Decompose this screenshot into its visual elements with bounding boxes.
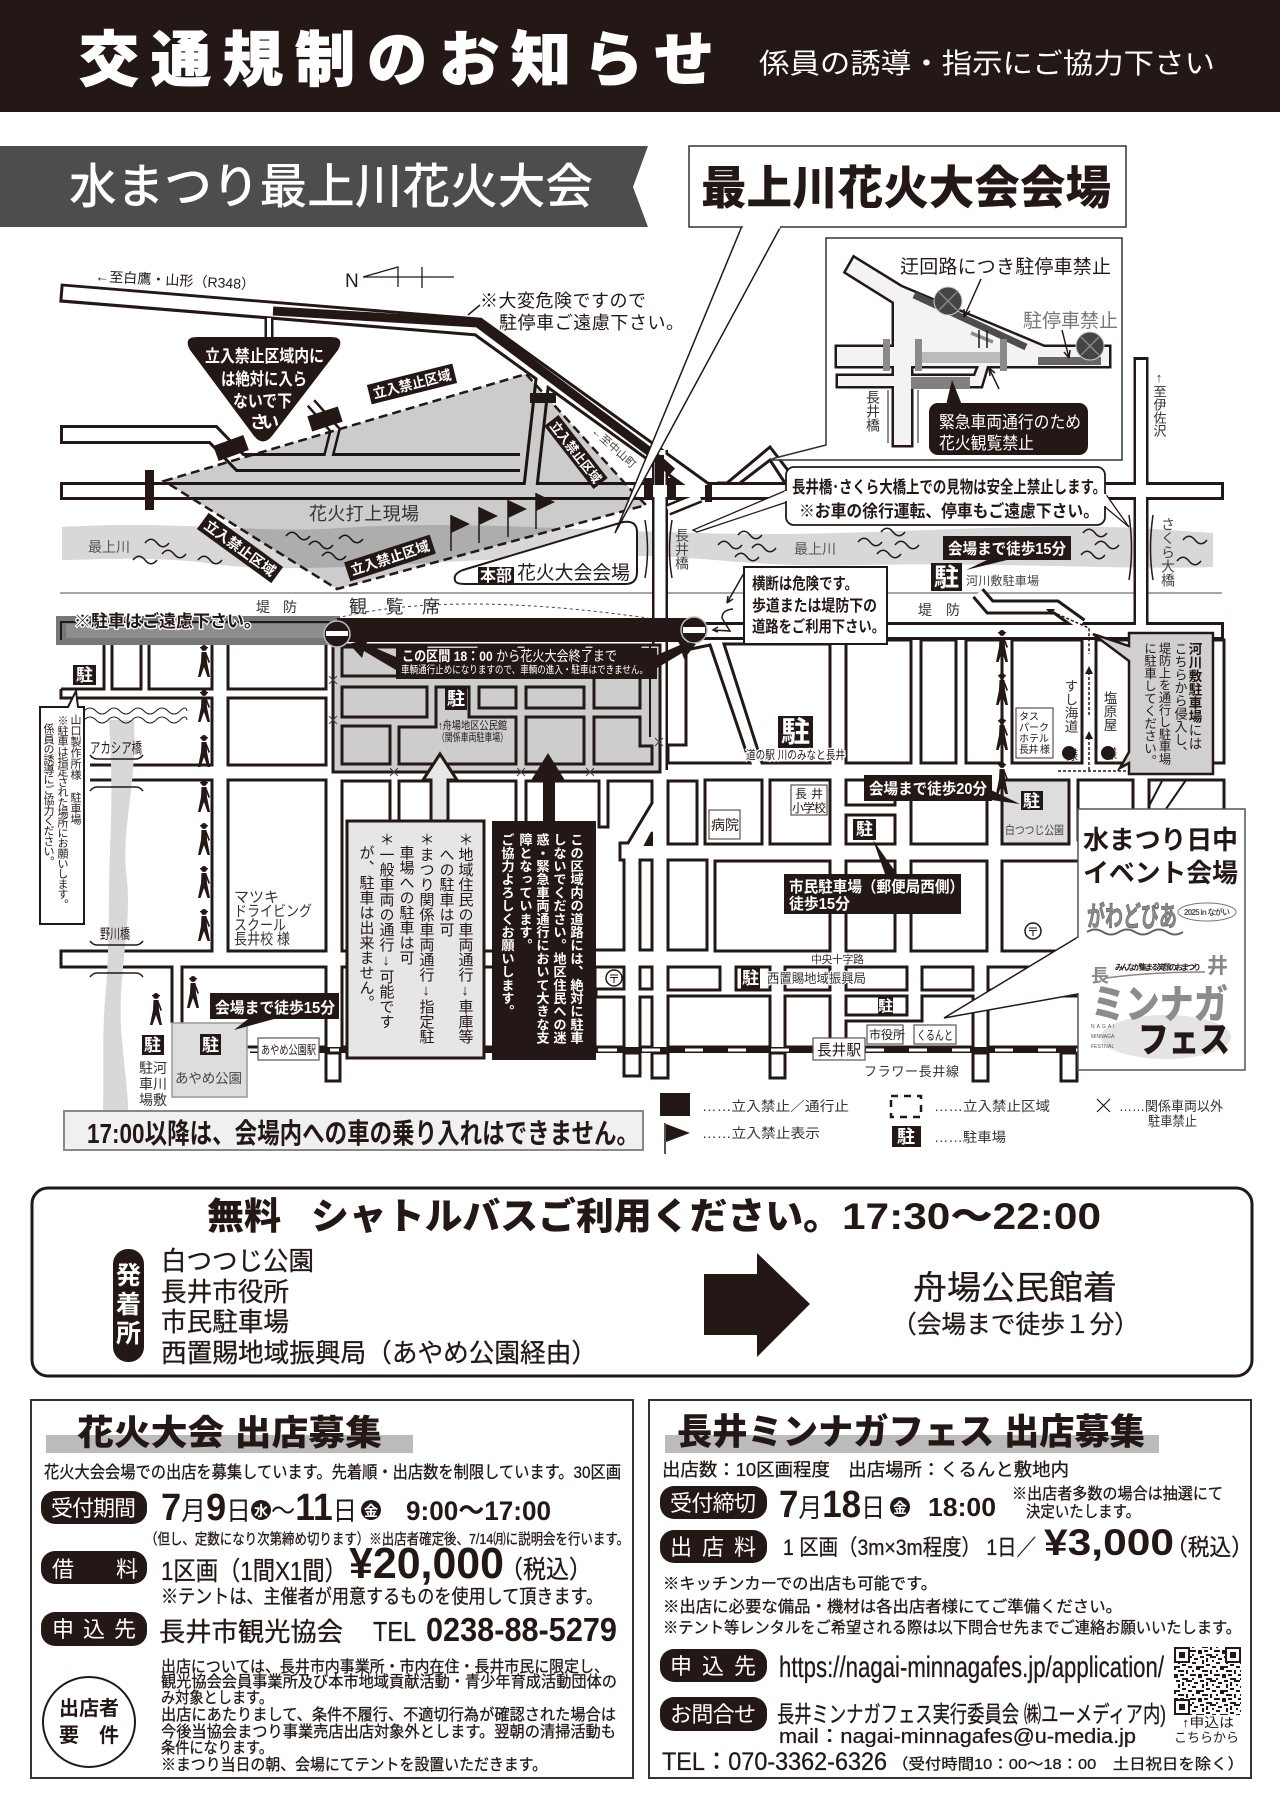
small road label: ←至中山町 xyxy=(589,425,639,471)
kurunto: くるんと xyxy=(917,1028,953,1043)
closure time callout: 車輌通行止めになりますので、車輌の進入・駐車はできません。 xyxy=(401,663,648,676)
creek ripples xyxy=(84,708,187,723)
post office east: 〒 xyxy=(1027,925,1039,939)
requirements text: 観光協会会員事業所及び本市地域貢献活動・青少年育成活動団体の xyxy=(161,1673,617,1691)
walk 20 min callout: 会場まで徒歩20分 xyxy=(869,780,987,798)
city hall xyxy=(867,1025,905,1044)
shuttle heading: 無料 xyxy=(207,1196,281,1237)
phone xyxy=(662,1748,1244,1776)
shuttle heading: 17:30～22:00 xyxy=(842,1196,1101,1237)
west parking callout: ※駐車は指定された場所にお願いします。 xyxy=(56,715,68,909)
heading: 長井ミンナガフェス 出店募集 xyxy=(677,1411,1145,1452)
black arrow note: 障となっています。 xyxy=(518,833,532,952)
fee: 借 xyxy=(52,1557,74,1582)
notes xyxy=(663,1575,1241,1637)
departure pill: 着 xyxy=(116,1291,141,1319)
nagai station: 長井駅 xyxy=(817,1042,861,1059)
requirements text: 今後当協会まつり事業売店出店対象外とします。翌朝の清掃活動も xyxy=(161,1723,616,1741)
closed road centre band xyxy=(273,311,672,472)
north arrow xyxy=(345,267,454,292)
river labels: 最上川 xyxy=(88,539,130,555)
road closure bars xyxy=(145,393,712,510)
inset arrows xyxy=(964,279,1070,389)
departure pill: 発 xyxy=(116,1262,141,1290)
nagai station xyxy=(813,1038,865,1060)
riverbed parking label xyxy=(139,1060,167,1108)
warning triangle: さい xyxy=(250,413,279,432)
levee labels: 堤 防 xyxy=(256,599,297,615)
shirotsutsuji park: 駐 xyxy=(1023,791,1040,811)
riverbed parking note: に駐車してください。 xyxy=(1142,642,1156,767)
shiobaraya: 塩原屋 様 xyxy=(1102,691,1117,760)
riverbed parking note: こちらから侵入し、 xyxy=(1172,642,1188,759)
regional office label: 西置賜地域振興局 xyxy=(767,971,866,986)
hospital: 病院 xyxy=(711,817,739,833)
driving school: スクール xyxy=(234,917,286,934)
heading: 花火大会 出店募集 xyxy=(77,1414,382,1453)
tas park hotel: ホテル xyxy=(1019,733,1049,745)
riverbed parking note: 河川敷駐車場 には xyxy=(1186,642,1202,750)
reception period: 金 xyxy=(364,1503,378,1519)
hospital xyxy=(709,810,740,839)
venue marker xyxy=(455,522,637,585)
viewing arc xyxy=(337,604,648,618)
elementary school: 長 井 xyxy=(795,787,823,801)
parking icons: 駐 xyxy=(742,968,759,988)
logo: minnaga fes: みんなが集まる笑顔のおまつり xyxy=(1115,962,1201,972)
north roads xyxy=(60,293,1224,770)
restricted area tag south: 立入禁止区域 xyxy=(349,538,431,578)
white arrow note: 車場への駐車は可 xyxy=(398,845,414,965)
funaba gray zone xyxy=(329,645,663,776)
inset parking bands xyxy=(883,295,1101,389)
departure stops: 西置賜地域振興局（あやめ公園経由） xyxy=(161,1338,597,1368)
restricted parking crosses xyxy=(329,676,663,776)
riverbed parking note: 堤防上を通行し駐車場 xyxy=(1157,642,1171,766)
warning triangle: 立入禁止区域内に xyxy=(205,346,324,366)
ayame park xyxy=(172,1023,247,1097)
application url: 申 込 先 xyxy=(670,1654,756,1679)
vendor fee: （税込） xyxy=(1166,1534,1253,1560)
danger note: ※大変危険ですので xyxy=(480,291,646,311)
no entry sign east xyxy=(681,617,707,643)
driving school xyxy=(234,889,312,948)
17:00 notice xyxy=(64,1111,643,1150)
application: TEL xyxy=(373,1616,416,1647)
sakura bridge label: さくら大橋 xyxy=(1160,517,1176,587)
riverbed parking label: 駐河 xyxy=(139,1060,167,1076)
bridge viewing warning: ※お車の徐行運転、停車もご遠慮下さい。 xyxy=(799,501,1099,521)
flags xyxy=(451,493,555,551)
no parking note on levee road: ※駐車はご遠慮下さい。 xyxy=(74,611,261,631)
banner: water festival xyxy=(0,146,648,227)
deadline: ※出店者多数の場合は抽選にて xyxy=(1012,1485,1223,1503)
qr code: ↑申込は xyxy=(1182,1715,1234,1730)
contact: mail：nagai-minnagafes@u-media.jp xyxy=(779,1726,1136,1748)
ayame park: あやめ公園 xyxy=(175,1071,242,1086)
ayame station: あやめ公園駅 xyxy=(261,1043,316,1057)
logo: minnaga fes xyxy=(1091,955,1231,1060)
shuttle arrow xyxy=(704,1253,810,1357)
departure stops: 市民駐車場 xyxy=(161,1307,289,1337)
restricted area xyxy=(164,374,646,589)
phone: （受付時間10：00～18：00 土日祝日を除く） xyxy=(892,1756,1244,1773)
levee labels: 観 覧 席 xyxy=(349,597,440,617)
levee parking dotted route xyxy=(1048,610,1136,771)
shirotsutsuji park: 白つつじ公園 xyxy=(1005,823,1064,837)
notes: ※出店に必要な備品・機材は各出店者様にてご準備ください。 xyxy=(663,1598,1122,1616)
legend: 駐 xyxy=(897,1127,915,1147)
requirements text: み対象とします。 xyxy=(161,1689,273,1707)
vendor fee: 1 区画（3m×3m程度） 1日／ xyxy=(783,1535,1036,1560)
nagai bridge label: 長井橋 xyxy=(674,528,690,570)
ayame park: 駐 xyxy=(202,1035,219,1055)
application: 0238-88-5279 xyxy=(426,1611,617,1648)
logo: minnaga fes: MINNAGA xyxy=(1091,1034,1115,1040)
walk 15 min callout west xyxy=(210,993,339,1030)
city hall: 市役所 xyxy=(869,1027,905,1042)
venue title callout xyxy=(615,146,1126,533)
driving school: ドライビング xyxy=(234,903,312,920)
17:00 notice: 17:00以降は、会場内への車の乗り入れはできません。 xyxy=(87,1118,639,1149)
shirotsutsuji park xyxy=(1005,791,1064,837)
levee labels: 堤 防 xyxy=(918,602,960,618)
arrival stop xyxy=(892,1269,1139,1339)
riverbed parking label: 車川 xyxy=(139,1076,167,1092)
driving school: マツキ xyxy=(234,889,279,906)
venue inset map xyxy=(770,238,1122,460)
reception period: 水 xyxy=(254,1503,268,1519)
vendor fee: ¥3,000 xyxy=(1044,1522,1174,1563)
fee xyxy=(41,1539,603,1608)
daytime event panel: イベント会場 xyxy=(1083,858,1238,888)
bridge viewing warning xyxy=(693,467,1129,532)
notes: ※キッチンカーでの出店も可能です。 xyxy=(663,1575,937,1593)
acacia bridge: アカシア橋 xyxy=(90,740,142,757)
venue marker: 本部 xyxy=(480,567,512,585)
deadline: 7月18日 xyxy=(779,1484,885,1526)
shuttle bus panel xyxy=(32,1188,1252,1376)
inset nagai bridge label: 長井橋 xyxy=(865,390,881,432)
riverbed parking label: 場敷 xyxy=(139,1092,167,1108)
inset nagai bridge label xyxy=(865,390,918,443)
river waves xyxy=(133,528,1207,565)
route arrowheads xyxy=(1046,609,1093,739)
requirements text: 出店については、長井市内事業所・市内在住・長井市民に限定し、 xyxy=(161,1658,609,1676)
reception period: 受付期間 xyxy=(51,1496,136,1521)
acacia bridge xyxy=(90,740,143,791)
driving school: 長井校 様 xyxy=(234,931,290,948)
black arrow note: しないでください。地区住民への迷 xyxy=(552,833,566,1045)
reception period: 7月9日 xyxy=(161,1487,251,1529)
crossing note: 横断は危険です。 xyxy=(752,574,858,593)
black arrow note: ご協力よろしくお願いします。 xyxy=(500,832,514,1018)
contact xyxy=(660,1697,1166,1748)
requirements badge: 要 件 xyxy=(59,1724,119,1747)
inset detour label: 迂回路につき駐停車禁止 xyxy=(900,256,1111,278)
road destination label west: ←至白鷹・山形（R348） xyxy=(95,268,255,292)
logo: minnaga fes: 長 xyxy=(1091,966,1109,986)
white arrow note: ＊一般車両の通行↓可能です xyxy=(378,832,394,1029)
post office west: 〒 xyxy=(608,972,620,986)
main title: 交通規制のお知らせ xyxy=(79,27,714,94)
danger note xyxy=(468,291,684,333)
restricted area tag west: 立入禁止区域 xyxy=(201,517,279,579)
citizen parking callout xyxy=(784,840,964,914)
qr code xyxy=(1174,1647,1241,1745)
panel: fireworks vendor recruitment xyxy=(31,1400,633,1778)
crossing note xyxy=(713,567,887,644)
fee: （税込） xyxy=(500,1556,592,1584)
emergency note: 緊急車両通行のため xyxy=(939,413,1081,432)
post office east xyxy=(1025,923,1041,939)
levee labels xyxy=(256,597,960,618)
tas park hotel: 長井 様 xyxy=(1019,743,1050,756)
logo: minnaga fes: フェス xyxy=(1138,1019,1230,1060)
west parking callout: 山口製作所様 駐車場 xyxy=(69,714,82,826)
crossing note: 道路をご利用下さい。 xyxy=(752,617,885,636)
logo: minnaga fes: ミンナガ xyxy=(1091,983,1228,1027)
logo: gawadopia: 2025 in ながい xyxy=(1184,907,1230,917)
parking icons: 駐 xyxy=(447,689,465,709)
parking icons: 駐 xyxy=(76,665,93,685)
post office west xyxy=(606,970,622,986)
vendor fee: 出 店 料 xyxy=(670,1535,756,1560)
application xyxy=(41,1611,617,1648)
tas park hotel: タス xyxy=(1019,711,1039,723)
requirements text: 条件になります。 xyxy=(161,1739,273,1757)
closure time callout xyxy=(396,648,657,679)
traffic map xyxy=(40,238,1245,1154)
east blocks xyxy=(652,640,1224,1081)
walk 20 min callout xyxy=(864,775,1020,804)
black arrow note: この区域内の道路には、絶対に駐車 xyxy=(568,833,584,1046)
black arrow note: 惑・緊急車両通行において大きな支 xyxy=(534,832,550,1046)
nogawa bridge xyxy=(90,926,143,977)
deadline: 決定いたします。 xyxy=(1026,1503,1140,1521)
arrival stop: 舟場公民館着 xyxy=(913,1269,1117,1306)
parking icons: 駐 xyxy=(878,997,893,1015)
central blocks xyxy=(342,781,652,1047)
logo: minnaga fes: NAGAI xyxy=(1091,1024,1117,1030)
requirements text: 出店にあたりまして、条件不履行、不適切行為が確認された場合は xyxy=(161,1706,616,1724)
intro text: 花火大会会場での出店を募集しています。先着順・出店数を制限しています。30区画 xyxy=(44,1463,621,1482)
fee: 料 xyxy=(116,1557,138,1582)
fee: 1区画（1間X1間） xyxy=(161,1556,347,1586)
daytime event panel xyxy=(944,780,1245,1070)
parking icons: 駐 xyxy=(934,564,959,592)
parking icons: 駐 xyxy=(781,716,810,749)
shuttle heading xyxy=(207,1195,1101,1237)
sushi kaido: すし海道 様 xyxy=(1062,679,1078,762)
reception period: （但し、定数になり次第締め切ります）※出店者確定後、7/14㈪に説明会を行います。 xyxy=(145,1531,629,1548)
vendor fee xyxy=(660,1522,1253,1563)
notes: ※テント等レンタルをご希望される際は以下問合せ先までご連絡お願いいたします。 xyxy=(663,1619,1241,1637)
ayame station xyxy=(258,1038,319,1060)
walking route markers xyxy=(150,630,1008,1025)
riverbed parking note xyxy=(1093,633,1213,774)
reception period: 9:00～17:00 xyxy=(406,1496,551,1526)
closed road band west xyxy=(56,616,340,645)
application: 申 込 先 xyxy=(52,1617,136,1642)
arrival stop: （会場まで徒歩１分） xyxy=(892,1311,1139,1339)
emergency note xyxy=(929,380,1088,455)
citizen parking callout: 徒歩15分 xyxy=(789,895,850,913)
warning triangle: は絶対に入ら xyxy=(221,370,307,389)
inset no parking label: 駐停車禁止 xyxy=(1023,310,1118,332)
elementary school xyxy=(791,785,827,815)
legend: ……駐車場 xyxy=(934,1130,1006,1145)
tas park hotel xyxy=(1016,708,1053,758)
no entry sign west xyxy=(324,621,350,647)
parking icons: 駐 xyxy=(856,819,873,839)
phone: TEL：070-3362-6326 xyxy=(662,1748,887,1776)
west blocks xyxy=(61,639,640,1081)
crossing note: 歩道または堤防下の xyxy=(752,597,877,615)
logo: minnaga fes: 井 xyxy=(1207,955,1228,978)
reception period xyxy=(41,1487,629,1548)
requirements badge: 出店者 xyxy=(59,1697,119,1720)
walk 15 min callout river xyxy=(943,536,1071,570)
isazawa direction label: ↑至伊佐沢 xyxy=(1152,370,1166,437)
white arrow note: が、駐車は出来ません。 xyxy=(358,845,374,1010)
reception period: ～11日 xyxy=(271,1487,357,1529)
closure arrows xyxy=(349,638,696,670)
departure stops xyxy=(161,1246,597,1368)
michi no eki label: 道の駅 川のみなと長井 xyxy=(746,748,845,762)
legend: 駐車禁止 xyxy=(1148,1114,1197,1129)
walk 15 min callout west: 会場まで徒歩15分 xyxy=(215,999,335,1017)
inset roads xyxy=(837,258,1109,445)
legend xyxy=(660,1093,1223,1154)
bridge viewing warning: 長井橋･さくら大橋上での見物は安全上禁止します。 xyxy=(792,477,1106,497)
parking icons: 駐 xyxy=(144,1035,161,1055)
north arrow: N xyxy=(345,271,359,292)
levee line xyxy=(60,592,1222,594)
panel: minnaga fes vendor recruitment xyxy=(649,1400,1253,1778)
venue marker: 花火大会会場 xyxy=(517,562,630,584)
header subtitle: 係員の誘導・指示にご協力下さい xyxy=(759,48,1215,79)
restricted area tag east: 立入禁止区域 xyxy=(547,419,604,486)
legend: ……立入禁止区域 xyxy=(934,1099,1050,1114)
triangle road junction xyxy=(717,447,790,483)
logo: gawadopia: がわどぴあ xyxy=(1087,900,1177,932)
closure time callout: この区間 18：00 から花火大会終了まで xyxy=(402,648,617,664)
emergency note: 花火観覧禁止 xyxy=(939,434,1034,453)
warning triangle xyxy=(188,337,340,442)
nogawa bridge: 野川橋 xyxy=(100,926,130,942)
requirements text: ※まつり当日の朝、会場にてテントを設置いただきます。 xyxy=(161,1756,547,1774)
contact: お問合せ xyxy=(670,1702,756,1727)
central crossroads label: 中央十字路 xyxy=(811,952,864,966)
fee: ¥20,000 xyxy=(349,1539,504,1588)
logo: minnaga fes: FESTIVAL xyxy=(1091,1044,1114,1050)
fee: ※テントは、主催者が用意するものを使用して頂きます。 xyxy=(161,1586,603,1608)
contact: 長井ミンナガフェス実行委員会 ㈱ユーメディア内) xyxy=(777,1701,1166,1727)
railway xyxy=(250,1047,1076,1053)
parking icons xyxy=(73,563,962,1055)
kurunto xyxy=(914,1025,956,1044)
closed road band black xyxy=(337,618,687,642)
flower nagai line: フラワー長井線 xyxy=(864,1064,959,1079)
funaba gray zone: ↑舟場地区公民館 xyxy=(438,718,507,732)
danger note: 駐停車ご遠慮下さい。 xyxy=(499,313,684,333)
legend: ……関係車両以外 xyxy=(1119,1099,1223,1114)
river labels: 最上川 xyxy=(794,541,836,557)
warning triangle: ないで下 xyxy=(233,392,292,411)
riverbed parking lot label: 河川敷駐車場 xyxy=(966,573,1039,588)
black arrow note xyxy=(492,753,596,1060)
funaba gray zone: （関係車両駐車場） xyxy=(437,730,508,744)
launch site label: 花火打上現場 xyxy=(309,504,419,524)
requirements badge xyxy=(43,1677,135,1767)
white arrow note: ＊地域住民の車両通行↓車庫等 xyxy=(456,832,474,1044)
departure pill xyxy=(113,1249,144,1362)
river xyxy=(62,525,1213,568)
legend: ……立入禁止／通行止 xyxy=(702,1099,849,1114)
banner: water festival: 水まつり最上川花火大会 xyxy=(69,161,593,214)
deadline: 受付締切 xyxy=(670,1491,756,1516)
tas park hotel: パーク xyxy=(1019,722,1049,734)
elementary school: 小学校 xyxy=(792,800,826,815)
white arrow note: への駐車は可 xyxy=(438,847,454,937)
shuttle heading: シャトルバスご利用ください。 xyxy=(311,1195,841,1237)
qr code: こちらから xyxy=(1174,1730,1239,1745)
deadline xyxy=(660,1484,1223,1526)
deadline: 金 xyxy=(893,1500,907,1516)
restricted area tag north: 立入禁止区域 xyxy=(371,367,453,401)
no parking marks xyxy=(934,287,1104,360)
venue title callout: 最上川花火大会会場 xyxy=(701,162,1111,214)
requirements text xyxy=(161,1658,617,1774)
application: 長井市観光協会 xyxy=(159,1617,343,1647)
departure pill: 所 xyxy=(116,1320,141,1348)
bridge arcs xyxy=(645,515,1153,580)
west stream xyxy=(103,720,134,1111)
river labels xyxy=(88,539,836,557)
deadline: 18:00 xyxy=(928,1492,996,1522)
daytime event panel: 水まつり日中 xyxy=(1083,825,1238,855)
scope text: 出店数：10区画程度 出店場所：くるんと敷地内 xyxy=(662,1460,1069,1480)
application url xyxy=(660,1649,1164,1684)
header band xyxy=(0,0,1280,112)
white arrow note: ＊まつり関係車両通行↓指定駐 xyxy=(418,832,434,1044)
white arrow note xyxy=(347,754,484,1058)
departure stops: 長井市役所 xyxy=(161,1277,289,1307)
west parking callout: 係員の誘導にご協力ください。 xyxy=(42,723,54,866)
walk 15 min callout river: 会場まで徒歩15分 xyxy=(948,540,1066,558)
legend: ……立入禁止表示 xyxy=(702,1126,820,1141)
departure stops: 白つつじ公園 xyxy=(161,1246,314,1276)
west parking callout xyxy=(40,691,84,924)
citizen parking callout: 市民駐車場（郵便局西側） xyxy=(789,877,964,896)
